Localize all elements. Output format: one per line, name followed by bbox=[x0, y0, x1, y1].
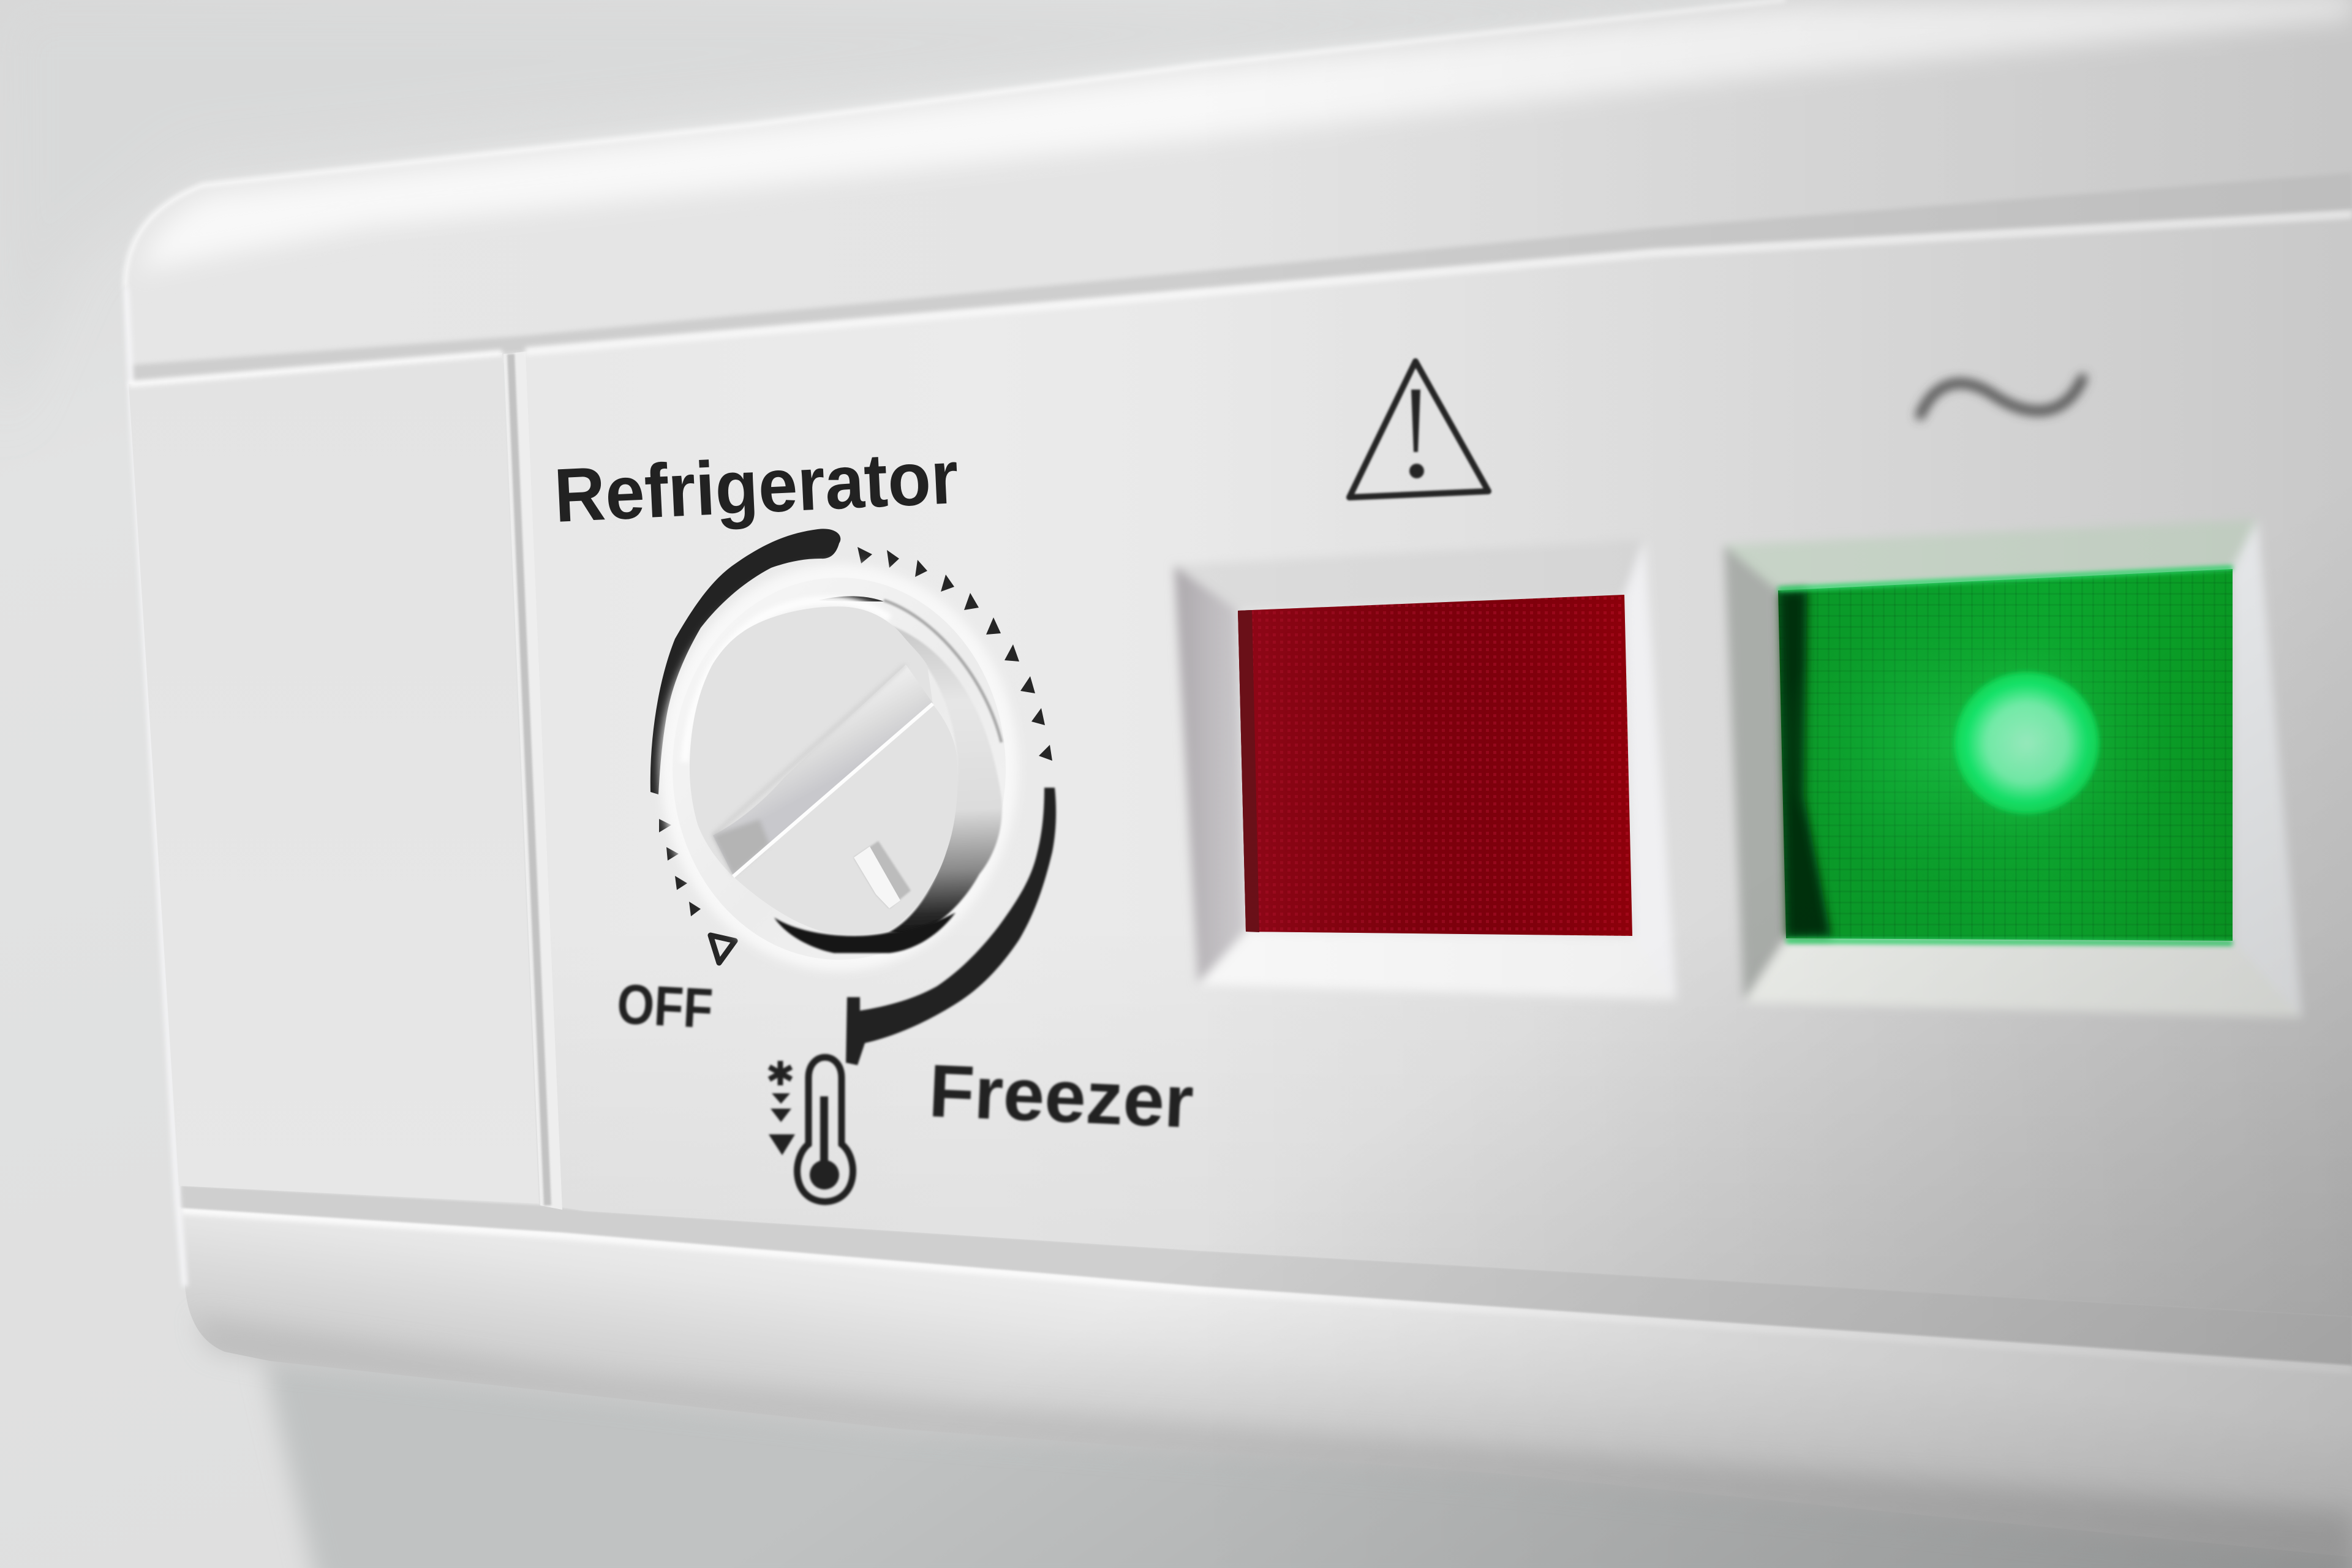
label: OFF: OFF bbox=[616, 973, 714, 1040]
slot shaded end bbox=[713, 820, 769, 875]
divider shadow line bbox=[511, 354, 548, 1205]
left edge highlight bbox=[126, 288, 185, 1286]
label: Refrigerator: Refrigerator bbox=[552, 435, 960, 538]
main control panel bbox=[526, 214, 2352, 1316]
bezel inner shade line bbox=[884, 600, 1001, 742]
lower ledge underside shading bbox=[196, 1317, 2352, 1568]
housing: lower ledge bbox=[178, 1207, 2352, 1568]
knob indicator pin bbox=[854, 841, 911, 908]
upper ledge highlight band bbox=[138, 0, 2352, 288]
icon: power tilde bbox=[1920, 379, 2082, 415]
vertical divider groove bbox=[503, 352, 562, 1210]
red lamp dark left strip bbox=[1238, 610, 1259, 932]
freezer arc with stop bar bbox=[846, 788, 1056, 1065]
dark gap under knob bbox=[774, 913, 956, 953]
label: Freezer: Freezer bbox=[927, 1049, 1195, 1144]
LED glowing dot bbox=[1935, 642, 2119, 844]
green lamp bbox=[1778, 569, 2233, 941]
knob face bbox=[690, 606, 957, 935]
dial bezel bbox=[660, 564, 1018, 971]
icon: warning triangle bbox=[1349, 361, 1488, 497]
green lamp dark left wedge bbox=[1779, 590, 1831, 937]
red lamp bbox=[1238, 595, 1632, 936]
dial tick marks: lower left bbox=[659, 819, 701, 916]
dial tick marks: upper right bbox=[858, 547, 1052, 761]
red indicator window bbox=[1174, 540, 1676, 1000]
green lamp edge glow bbox=[1778, 568, 2233, 943]
lower ledge highlight line bbox=[181, 1210, 2352, 1370]
housing: upper ledge bbox=[125, 0, 2352, 392]
green indicator window bbox=[1724, 519, 2302, 1017]
green lamp glow bbox=[1770, 597, 2187, 891]
green window recess bbox=[1724, 519, 2302, 1017]
thick refrigerator arc bbox=[650, 529, 840, 794]
blank left panel bbox=[129, 353, 539, 1204]
red window recess bbox=[1174, 540, 1676, 1000]
recess top dark sliver bbox=[818, 596, 884, 601]
housing top crisp edge bbox=[125, 0, 1785, 288]
knob grip slot bbox=[713, 665, 933, 876]
knob rim highlight bbox=[685, 600, 889, 762]
icon: thermometer with freeze markers bbox=[769, 1057, 853, 1202]
dial assembly bbox=[660, 564, 1018, 971]
wall shadow below housing bbox=[263, 1360, 2352, 1568]
lower groove shadow bbox=[180, 1186, 2352, 1365]
upper groove shadow bbox=[130, 173, 2352, 385]
OFF position triangle bbox=[710, 935, 735, 963]
knob side wall bbox=[889, 625, 1002, 936]
